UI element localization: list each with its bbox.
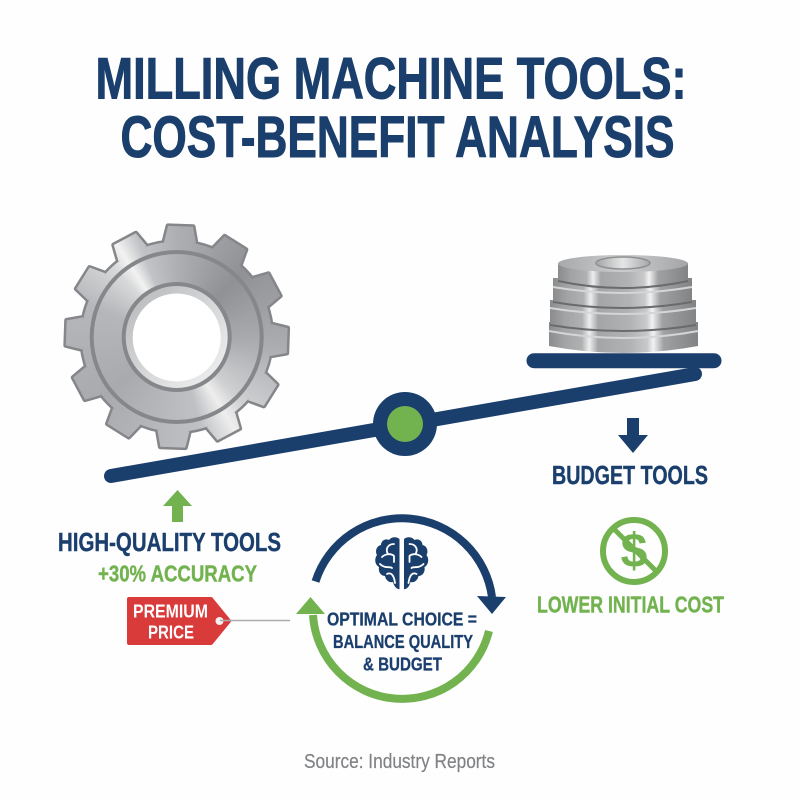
icon: brain (375, 537, 428, 589)
gear outline (66, 226, 288, 448)
gear inner collar (124, 284, 230, 390)
text: optimal choice (327, 608, 477, 674)
arrow: up, green (163, 490, 192, 522)
gear bore (133, 294, 221, 382)
budget platform (534, 353, 714, 368)
gear outer ring (92, 252, 262, 422)
icon: steel gear (63, 223, 290, 450)
title (96, 46, 686, 170)
cycle arrow: navy (316, 518, 506, 614)
price tag: PREMIUM (133, 600, 208, 622)
text: lower initial cost: LOWER INITIAL COST (537, 592, 724, 618)
icon: no dollar (603, 520, 665, 582)
text: optimal choice: BALANCE QUALITY (333, 631, 474, 652)
price tag: PRICE (148, 622, 194, 642)
disc hole (596, 257, 650, 269)
icon: stack of steel discs (549, 255, 698, 353)
heading: budget tools: BUDGET TOOLS (552, 462, 708, 490)
connector line (220, 620, 290, 622)
text: optimal choice: & BUDGET (363, 654, 443, 674)
heading: high-quality tools: HIGH-QUALITY TOOLS (58, 527, 281, 557)
source: Source: Industry Reports (304, 751, 495, 773)
text: optimal choice: OPTIMAL CHOICE = (327, 608, 477, 630)
balance beam (111, 374, 695, 476)
disc 4 (549, 322, 698, 353)
disc 2 (553, 278, 692, 308)
icon: no dollar: $ (621, 525, 648, 578)
disc 1 (558, 263, 688, 288)
arrow: down, navy (618, 418, 648, 453)
gear metallic face (66, 226, 288, 448)
disc 3 (550, 300, 696, 331)
price tag (129, 599, 229, 643)
text: accuracy gain: +30% ACCURACY (98, 560, 257, 586)
pivot (373, 392, 437, 456)
cycle arrow: green (296, 597, 489, 699)
